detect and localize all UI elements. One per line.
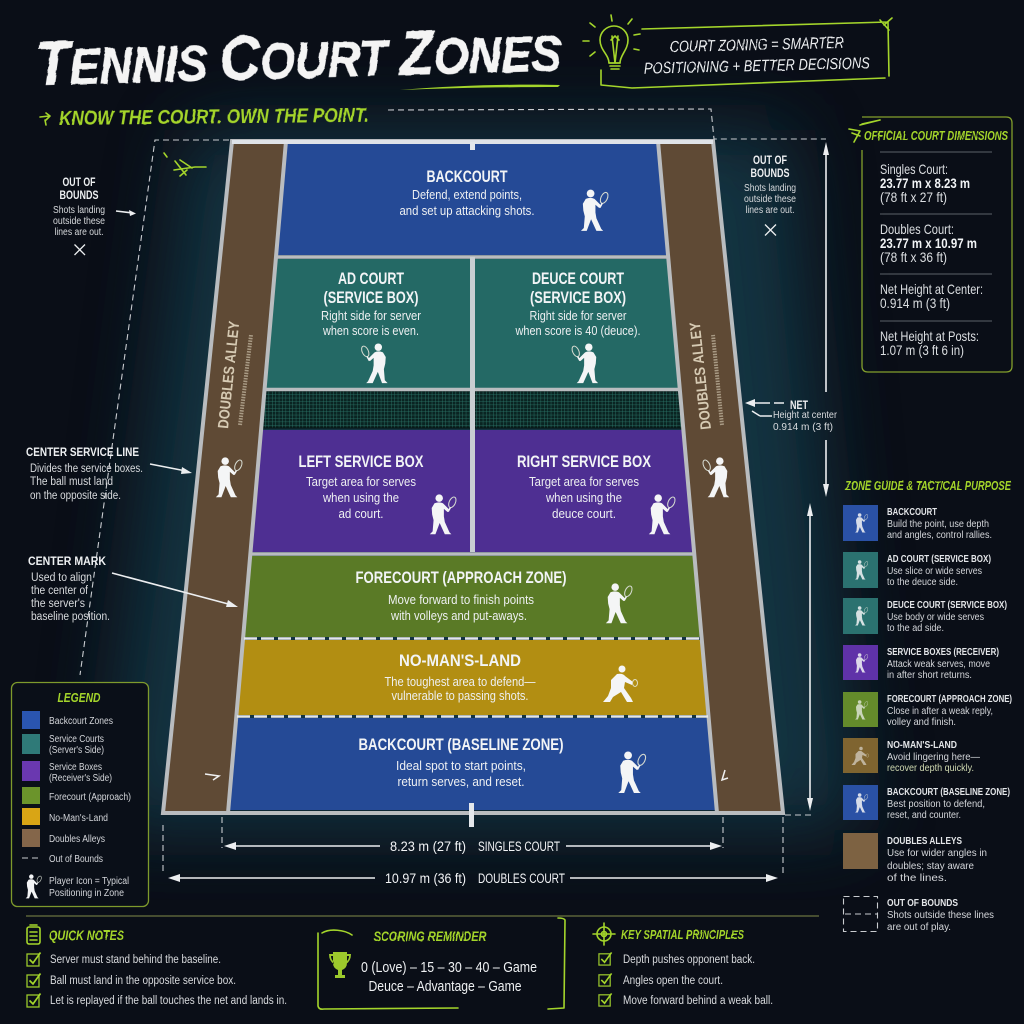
callout: center service line: Divides the service boxes. [30,463,143,475]
tip text: COURT ZONING = SMARTER [670,35,844,56]
block: net center: 0.914 m (3 ft) [880,295,950,311]
panel: key spatial principles [593,923,773,1007]
text: left service box: ad court. [338,506,384,521]
row: forecourt: Close in after a weak reply, [887,706,993,717]
item: forecourt [22,787,131,804]
item: forecourt: Forecourt (Approach) [49,792,131,803]
text: right service box [517,453,651,521]
zone: right service box [475,430,693,552]
callout: center mark: the server's [31,598,85,610]
row: ad court [843,552,991,588]
item: service courts: Service Courts [49,734,104,745]
item: service courts [22,734,104,756]
arrow: court length top [823,142,829,497]
callout: center mark: Used to align [31,572,92,584]
panel: scoring reminder [318,918,565,1009]
player: left service box [430,494,457,534]
heading: backcourt: Defend, extend points, [412,187,522,202]
principle 3 [599,993,773,1007]
principle 3: Move forward behind a weak ball. [623,995,773,1007]
row: doubles alleys [843,833,987,884]
callout: out of bounds right: lines are out. [746,205,794,216]
text: forecourt: with volleys and put-aways. [390,608,527,623]
text: deuce court: when score is 40 (deuce). [515,323,640,338]
callout: net: 0.914 m (3 ft) [773,422,833,433]
callout: center mark: the center of [31,585,89,597]
callout: out of bounds left: Shots landing [53,205,105,216]
item: out of bounds [22,854,103,865]
label: right doubles alley: DOUBLES ALLEY [687,321,715,430]
row: no-man's-land: recover depth quickly. [887,763,974,774]
row: no-man's-land: NO-MAN'S-LAND [887,740,957,751]
player: no-man's-land [603,666,638,702]
player: ad court [360,343,388,383]
text: deuce court: (SERVICE BOX) [530,289,626,307]
text: left service box: when using the [322,490,399,505]
text: left service box [298,453,424,521]
row: backcourt: and angles, control rallies. [887,530,992,541]
callout: center service line: The ball must land [30,476,113,488]
text: right service box: deuce court. [552,506,616,521]
text: right service box: Target area for serves [529,474,639,489]
block: net posts: Net Height at Posts: [880,328,979,344]
text: no-man's-land: The toughest area to defend— [384,674,536,689]
row: out of bounds [844,896,994,933]
icon: scribble [849,120,880,142]
player: left alley [216,457,243,497]
tennis court [163,141,783,827]
out of bounds boundary [80,109,826,675]
callout: center mark [28,554,238,623]
callout: out of bounds right: BOUNDS [750,168,790,180]
zone: left service box [251,430,470,552]
block: doubles court: 23.77 m x 10.97 m [880,235,977,251]
row: doubles alleys: doubles; stay aware [887,861,974,872]
panel: official court dimensions [849,117,1012,372]
block: singles court: (78 ft x 27 ft) [880,189,947,205]
text: left service box: LEFT SERVICE BOX [298,453,424,471]
row: ad court: Use slice or wide serves [887,566,982,577]
row: backcourt [843,505,992,541]
heading: scoring reminder: SCORING REMINDER [374,928,487,944]
item: doubles alleys [22,829,105,847]
callout: net: Height at center [773,410,838,421]
block: net center [880,281,983,311]
item: no-man's-land: No-Man's-Land [49,813,108,824]
callout: out of bounds left: outside these [53,216,105,227]
row: baseline backcourt: reset, and counter. [887,810,961,821]
item: service boxes: Service Boxes [49,762,102,773]
block: singles court: Singles Court: [880,161,948,177]
text: forecourt: Move forward to finish points [388,592,534,607]
text: left service box: Target area for serves [306,474,416,489]
row: deuce court: to the ad side. [887,623,944,634]
callout: center service line: on the opposite side. [30,490,121,502]
row: doubles alleys: of the lines. [887,873,947,884]
dimension: doubles court [163,817,783,886]
row: deuce court [843,598,1007,634]
dimension: singles court [222,817,723,854]
zone: forecourt [244,556,701,637]
text: deuce court [515,270,640,338]
item: doubles alleys: Doubles Alleys [49,834,105,845]
text: no-man's-land: NO-MAN'S-LAND [399,652,521,670]
note 1: Server must stand behind the baseline. [50,954,221,966]
text: ad court: (SERVICE BOX) [324,289,418,307]
icon: target [593,923,615,945]
player: forecourt [606,583,633,623]
block: doubles court [880,221,977,265]
heading: legend: LEGEND [58,691,100,705]
row: doubles alleys: Use for wider angles in [887,848,987,859]
row: no-man's-land [843,738,980,774]
principle 1: Depth pushes opponent back. [623,954,755,966]
principle 2 [599,973,723,987]
heading: backcourt: BACKCOURT [426,168,508,186]
callout: out of bounds left: BOUNDS [60,190,99,202]
item: backcourt zones: Backcourt Zones [49,716,113,727]
block: singles court: 23.77 m x 8.23 m [880,175,970,191]
row: ad court: AD COURT (SERVICE BOX) [887,554,991,565]
label: right doubles alley [687,321,722,430]
row: no-man's-land: Avoid lingering here— [887,752,980,763]
item: no-man's-land [22,808,108,825]
row: ad court: to the deuce side. [887,577,958,588]
tip text: POSITIONING + BETTER DECISIONS [644,55,870,78]
dimension: singles court: SINGLES COURT [478,839,560,854]
panel: quick notes [27,925,287,1007]
callout: out of bounds right [744,155,796,236]
score line 2: Deuce – Advantage – Game [368,978,522,995]
text: ad court: Right side for server [321,308,422,323]
text: ad court: AD COURT [338,270,404,288]
callout: out of bounds left: OUT OF [62,177,96,189]
callout: net: NET [790,400,808,412]
dimension: doubles court: DOUBLES COURT [478,871,565,886]
block: singles court [880,161,970,205]
row: baseline backcourt: Best position to defend, [887,799,985,810]
tip text [644,35,870,78]
row: doubles alleys: DOUBLES ALLEYS [887,836,962,847]
title: TENNIS COURT ZONES [34,15,562,99]
doubles alley left [163,141,287,813]
heading: quick notes: QUICK NOTES [49,928,124,943]
block: net posts: 1.07 m (3 ft 6 in) [880,342,964,358]
player: deuce court [571,343,598,383]
tip frame [601,18,892,88]
text: deuce court: DEUCE COURT [532,270,624,288]
text: no-man's-land: vulnerable to passing shots. [392,688,528,703]
row: service boxes: in after short returns. [887,670,972,681]
text: deuce court: Right side for server [530,308,627,323]
zone: deuce court [475,259,679,388]
callout: out of bounds left: lines are out. [54,227,104,238]
dimension: doubles court: 10.97 m (36 ft) [385,871,466,886]
tagline: KNOW THE COURT. OWN THE POINT. [59,105,369,130]
text: baseline backcourt [358,736,564,789]
callout: center mark: CENTER MARK [28,554,106,568]
principle 1 [599,952,755,966]
icon: clipboard [27,925,40,944]
text: forecourt: FORECOURT (APPROACH ZONE) [356,569,566,587]
panel: legend [12,682,148,906]
text: right service box: RIGHT SERVICE BOX [517,453,651,471]
text: no-man's-land [384,652,536,703]
note 3: Let is replayed if the ball touches the net and lands in. [50,995,287,1007]
doubles alley right [657,141,783,813]
item: service courts: (Server's Side) [49,745,104,756]
callout: out of bounds right: Shots landing [744,183,796,194]
label: left doubles alley: DOUBLES ALLEY [215,320,243,429]
arrow: court length bottom [785,503,813,815]
row: forecourt: volley and finish. [887,717,956,728]
note 2: Ball must land in the opposite service box. [50,975,236,987]
callout: center service line: CENTER SERVICE LINE [26,445,139,459]
callout: center mark: baseline position. [31,611,110,623]
row: service boxes [843,645,999,681]
text: ad court: when score is even. [322,323,419,338]
text: right service box: when using the [545,490,622,505]
block: doubles court: Doubles Court: [880,221,954,237]
court lines [163,141,783,827]
callout: net [745,399,838,433]
dimension: singles court: 8.23 m (27 ft) [390,839,466,854]
net [261,391,683,428]
text: baseline backcourt: Ideal spot to start points, [396,758,526,773]
principle 2: Angles open the court. [623,975,723,987]
item: out of bounds: Out of Bounds [49,854,103,865]
callout: out of bounds right: OUT OF [753,155,787,167]
player: backcourt [581,190,610,231]
block: net posts [880,328,979,358]
callout: out of bounds right: outside these [744,194,796,205]
row: service boxes: Attack weak serves, move [887,659,990,670]
text: baseline backcourt: return serves, and reset. [398,774,524,789]
zone: ad court [266,259,470,388]
panel: zone guide [843,479,1012,933]
text: baseline backcourt: BACKCOURT (BASELINE ZONE) [358,736,564,754]
row: backcourt: BACKCOURT [887,507,937,518]
player: right alley [702,457,729,497]
item: player icon: Player Icon = Typical [49,876,129,887]
item: player icon: Positioning in Zone [49,888,124,899]
block: doubles court: (78 ft x 36 ft) [880,249,947,265]
text: forecourt [356,569,566,623]
heading: key spatial principles: KEY SPATIAL PRINCIPLES [621,927,744,942]
icon: trophy [329,952,351,978]
block: net center: Net Height at Center: [880,281,983,297]
item: backcourt zones [22,711,113,729]
row: deuce court: Use body or wide serves [887,612,984,623]
item: service boxes [22,761,112,784]
row: forecourt [843,692,1012,728]
tip callout [583,15,892,88]
zone: backcourt [277,143,667,255]
callout: center service line [26,445,192,502]
row: baseline backcourt [843,785,1010,821]
heading: backcourt: and set up attacking shots. [400,203,534,218]
zone: no-man's-land [237,640,708,715]
row: out of bounds: are out of play. [887,922,951,933]
item: player icon [26,874,129,899]
zone: baseline backcourt [229,718,716,810]
row: out of bounds: OUT OF BOUNDS [887,898,958,909]
heading: backcourt [400,168,534,218]
row: backcourt: Build the point, use depth [887,519,989,530]
item: service boxes: (Receiver's Side) [49,773,112,784]
text: ad court [321,270,422,338]
note 1 [27,952,221,966]
score line 1: 0 (Love) – 15 – 30 – 40 – Game [361,959,537,976]
callout: out of bounds left [53,177,136,255]
title underline [400,85,560,90]
player: right service box [649,494,676,534]
player: baseline [618,751,647,793]
row: out of bounds: Shots outside these lines [887,910,994,921]
icon: light bulb [583,15,640,69]
